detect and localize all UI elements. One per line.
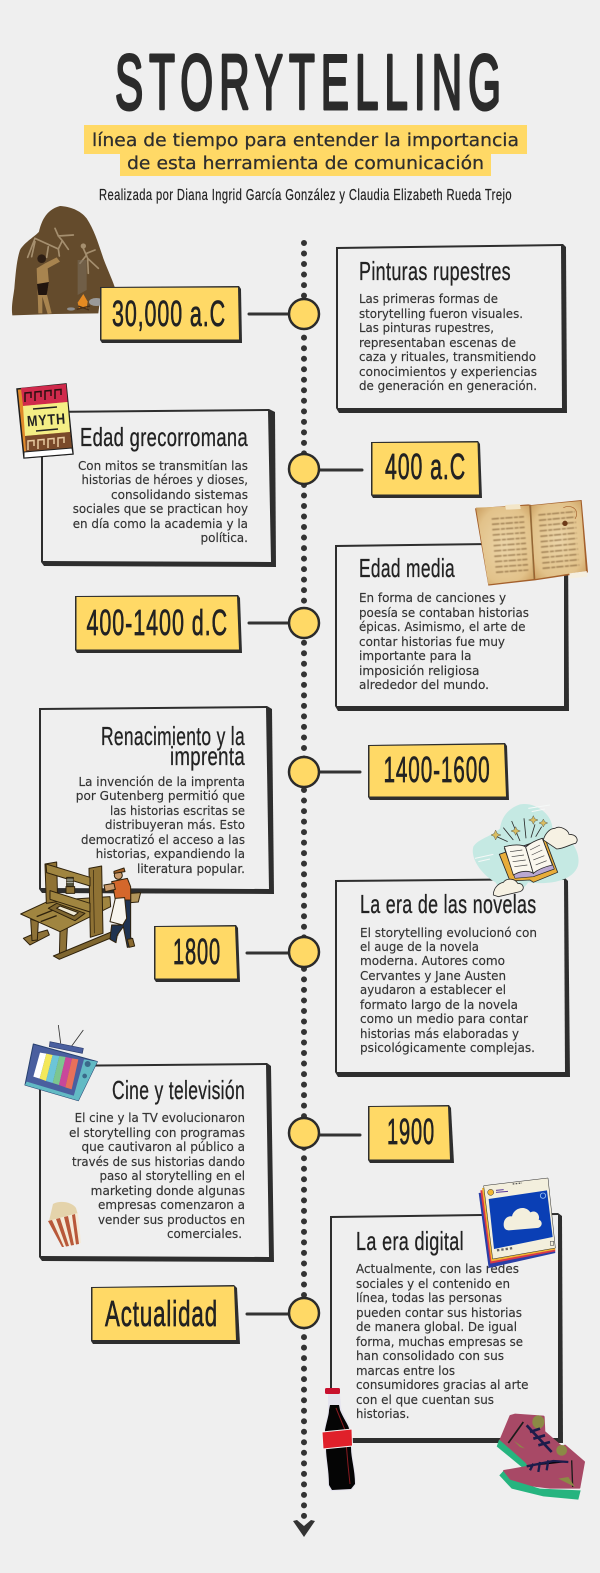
- body text: que cautivaron al público a: [82, 1140, 245, 1154]
- body text: poesía se contaban historias: [359, 606, 529, 620]
- body text: línea, todas las personas: [356, 1291, 502, 1305]
- body text: historias, expandiendo la: [96, 847, 245, 861]
- icon: cave painting: [12, 206, 116, 315]
- body text: paso al storytelling en el: [100, 1169, 245, 1183]
- subtitle: [84, 125, 527, 176]
- date: 400 a.C: 400 a.C: [385, 446, 466, 487]
- body text: historias más elaboradas y: [360, 1027, 519, 1041]
- body text: imposición religiosa: [359, 664, 480, 678]
- heading: Pinturas rupestres: [359, 256, 511, 286]
- panel: La era de las novelas: [335, 878, 570, 1077]
- date: Actualidad: Actualidad: [105, 1293, 218, 1334]
- connector 30,000 a.C: [249, 299, 319, 329]
- body text: [360, 926, 537, 1055]
- body text: El storytelling evolucionó con: [360, 926, 537, 940]
- icon: soda bottle: [322, 1388, 356, 1491]
- body text: historias de héroes y dioses,: [82, 473, 248, 487]
- body text: consolidando sistemas: [111, 488, 248, 502]
- body text: las historias escritas se: [110, 804, 245, 818]
- body text: representaban escenas de: [359, 336, 516, 350]
- body text: han consolidado con sus: [356, 1349, 504, 1363]
- body text: En forma de canciones y: [359, 591, 506, 605]
- connector Actualidad: [247, 1298, 319, 1328]
- body text: contar historias fue muy: [359, 635, 505, 649]
- panel: La era digital: [330, 1213, 563, 1443]
- connector 1400-1600: [289, 757, 360, 787]
- heading: Cine y televisión: [112, 1075, 245, 1105]
- connector 400 a.C: [289, 454, 362, 484]
- body text: Con mitos se transmitían las: [78, 459, 248, 473]
- timeline dotted line: [301, 243, 307, 1516]
- panel: Edad media: [335, 542, 569, 711]
- heading: La era digital: [356, 1226, 464, 1256]
- heading: [101, 721, 245, 771]
- body text: el storytelling con programas: [69, 1126, 245, 1140]
- date: 1800: 1800: [173, 931, 221, 972]
- body text: El cine y la TV evolucionaron: [75, 1111, 245, 1125]
- date: 1400-1600: 1400-1600: [384, 749, 490, 790]
- body text: través de sus historias dando: [72, 1155, 245, 1169]
- date: 30,000 a.C: [100, 286, 242, 343]
- panel: Cine y televisión: [39, 1063, 274, 1262]
- body text: La invención de la imprenta: [78, 775, 245, 789]
- body text: alrededor del mundo.: [359, 678, 489, 692]
- body text: Las primeras formas de: [359, 292, 498, 306]
- icon: old open book: [475, 500, 588, 586]
- body text: comerciales.: [167, 1227, 242, 1241]
- body text: [356, 1262, 528, 1421]
- body text: en día como la academia y la: [73, 517, 248, 531]
- body text: democratizó el acceso a las: [81, 833, 245, 847]
- body text: marcas entre los: [356, 1364, 455, 1378]
- body text: de manera global. De igual: [356, 1320, 517, 1334]
- body text: caza y rituales, transmitiendo: [359, 350, 536, 364]
- icon: retro television: [25, 1025, 97, 1101]
- body text: por Gutenberg permitió que: [76, 789, 245, 803]
- body text: vender sus productos en: [98, 1213, 245, 1227]
- body text: forma, muchas empresas se: [356, 1335, 523, 1349]
- connector 400-1400 d.C: [249, 608, 319, 638]
- body text: marketing donde algunas: [91, 1184, 245, 1198]
- body text: distribuyeran más. Esto: [105, 818, 245, 832]
- body text: de generación en generación.: [359, 379, 537, 393]
- icon: social media post: [479, 1178, 555, 1268]
- icon: myth book: [17, 384, 73, 458]
- panel: Pinturas rupestres: [336, 244, 567, 413]
- date: 400 a.C: [371, 441, 482, 498]
- heading: Renacimiento y la: [101, 721, 245, 751]
- date: 1900: 1900: [387, 1111, 435, 1152]
- body text: [76, 775, 245, 876]
- body text: épicas. Asimismo, el arte de: [359, 620, 526, 634]
- subtitle: de esta herramienta de comunicación: [127, 153, 484, 174]
- panel: Renacimiento y la imprenta: [39, 706, 274, 894]
- body text: storytelling fueron visuales.: [359, 307, 523, 321]
- body text: moderna. Autores como: [360, 954, 505, 968]
- body text: [359, 591, 529, 692]
- date: 1800: [154, 925, 240, 982]
- body text: [69, 1111, 245, 1241]
- body text: Las pinturas rupestres,: [359, 321, 494, 335]
- body text: Actualmente, con las redes: [356, 1262, 519, 1276]
- body text: política.: [200, 531, 248, 545]
- heading: imprenta: [170, 741, 245, 771]
- body text: el auge de la novela: [360, 940, 479, 954]
- date: Actualidad: [91, 1285, 240, 1344]
- body text: ayudaron a establecer el: [360, 983, 506, 997]
- date: 1900: [368, 1105, 454, 1163]
- body text: pueden contar sus historias: [356, 1306, 522, 1320]
- icon: popcorn: [48, 1202, 81, 1247]
- body text: historias.: [356, 1407, 410, 1421]
- body text: literatura popular.: [137, 862, 245, 876]
- body text: sociales que se practican hoy: [73, 502, 248, 516]
- body text: Cervantes y Jane Austen: [360, 969, 506, 983]
- body text: como un medio para contar: [360, 1012, 528, 1026]
- heading: Edad media: [359, 553, 455, 583]
- subtitle: línea de tiempo para entender la importancia: [92, 130, 519, 151]
- body text: importante para la: [359, 649, 472, 663]
- body text: empresas comenzaron a: [98, 1198, 245, 1212]
- body text: [73, 459, 248, 545]
- body text: con el que cuentan sus: [356, 1393, 494, 1407]
- icon: sneakers: [497, 1415, 584, 1500]
- connector 1900: [289, 1118, 360, 1148]
- body text: conocimientos y experiencias: [359, 365, 537, 379]
- icon: myth book: MYTH: [26, 411, 67, 430]
- body text: sociales y el contenido en: [356, 1277, 510, 1291]
- connector 1800: [247, 937, 319, 967]
- heading: Edad grecorromana: [80, 422, 248, 452]
- body text: [359, 292, 537, 393]
- body text: formato largo de la novela: [360, 998, 518, 1012]
- panel: Edad grecorromana: [41, 409, 276, 567]
- date: 30,000 a.C: 30,000 a.C: [112, 293, 226, 334]
- icon: magic open book: [473, 804, 579, 897]
- icon: printing press: [21, 862, 141, 959]
- body text: psicológicamente complejas.: [360, 1041, 535, 1055]
- date: 400-1400 d.C: 400-1400 d.C: [86, 602, 228, 643]
- date: 1400-1600: [368, 743, 509, 800]
- date: 400-1400 d.C: [75, 595, 242, 653]
- arrow head: [293, 1520, 315, 1537]
- body text: consumidores gracias al arte: [356, 1378, 528, 1392]
